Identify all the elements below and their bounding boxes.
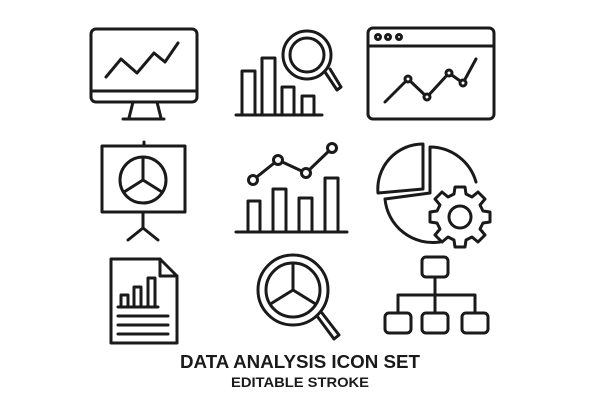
- icon: document report: [111, 259, 177, 343]
- icon: bar chart with trend line: [236, 144, 347, 232]
- subtitle: EDITABLE STROKE: [231, 374, 369, 390]
- icon: browser window with line chart: [368, 28, 494, 119]
- icon: bar chart with magnifier: [236, 31, 341, 115]
- title: DATA ANALYSIS ICON SET: [180, 352, 420, 372]
- icon: hierarchy diagram: [385, 257, 488, 333]
- icon: presentation easel with pie: [102, 142, 185, 240]
- icon: pie chart with gear: [378, 144, 490, 247]
- icon: monitor with line chart: [91, 29, 197, 119]
- icon: magnifier with pie: [258, 255, 339, 339]
